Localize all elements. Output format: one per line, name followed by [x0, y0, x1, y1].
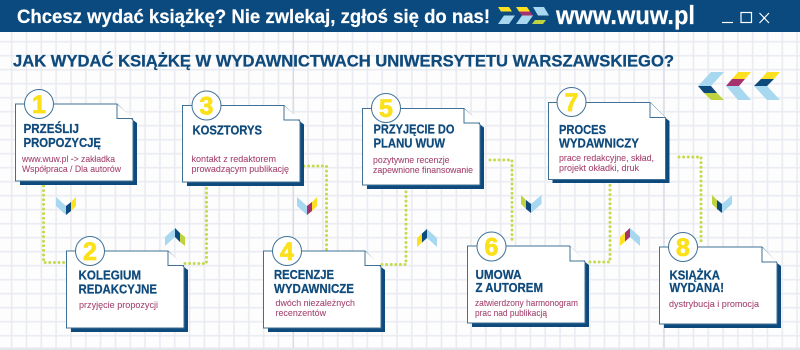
number 4: 4	[280, 238, 294, 266]
panel: step 5	[362, 94, 484, 189]
title: JAK WYDAĆ KSIĄŻKĘ W WYDAWNICTWACH UNIWERSYTETU WARSZAWSKIEGO?	[13, 52, 674, 70]
description: kontakt z redaktorem	[192, 154, 276, 164]
panel: step 7: WYDAWNICZY	[559, 136, 639, 150]
heading: PROCES	[559, 122, 606, 137]
number 7: 7	[565, 89, 578, 117]
panel: step 1	[16, 90, 137, 185]
description: zatwierdzony harmonogram	[475, 298, 578, 308]
panel: step 1: Współpraca / Dla autorów	[22, 164, 121, 174]
panel: step 5: PLANU WUW	[374, 136, 446, 150]
icon: chevron up 6	[620, 228, 640, 246]
number 2: 2	[83, 238, 97, 266]
panel: step 5: zapewnione finansowanie	[373, 165, 473, 175]
panel: step 2: REDAKCYJNE	[78, 282, 157, 296]
description: dwóch niezależnych	[276, 298, 355, 308]
panel: step 6: Z AUTOREM	[476, 280, 543, 295]
connector 5 to 6	[490, 160, 512, 243]
description: pozytywne recenzje	[373, 155, 450, 165]
heading: PRZEŚLIJ	[24, 121, 79, 136]
number 6: 6	[485, 234, 498, 262]
icon: chevron down 1	[56, 197, 76, 215]
description: www.wuw.pl -> zakładka	[21, 154, 116, 164]
number 1: 1	[32, 91, 46, 119]
heading: KSIĄŻKA	[670, 268, 720, 282]
number 8: 8	[676, 234, 690, 262]
panel: step 1: PROPOZYCJĘ	[24, 135, 101, 150]
connector 1 to 2	[44, 186, 66, 262]
heading: PRZYJĘCIE DO	[374, 122, 455, 136]
number 3: 3	[200, 92, 213, 120]
heading: KOLEGIUM	[78, 268, 141, 282]
connector 6 to 7	[590, 184, 610, 262]
panel: step 7	[548, 88, 670, 183]
icon: header chevrons	[498, 7, 549, 24]
icon: chevron down 7	[712, 195, 732, 213]
panel: step 6	[468, 232, 589, 327]
description: prace redakcyjne, skład,	[559, 153, 654, 163]
connector 7 to 8	[679, 157, 701, 241]
panel: step 6: prac nad publikacją	[475, 308, 548, 318]
icon: chevron up 4	[417, 229, 437, 247]
description: dystrybucja i promocja	[669, 299, 760, 309]
panel: step 4: WYDAWNICZE	[274, 281, 354, 296]
heading: RECENZJE	[274, 267, 334, 282]
icon: chevron down 3	[297, 197, 317, 215]
heading: KOSZTORYS	[192, 122, 262, 138]
panel: step 3	[182, 91, 304, 186]
header bar	[0, 0, 800, 32]
panel: step 2	[66, 236, 188, 332]
heading: UMOWA	[476, 267, 522, 282]
header slogan: Chcesz wydać książkę? Nie zwlekaj, zgłoś się do nas!	[17, 7, 490, 28]
icon: chevron down 5	[521, 195, 542, 213]
icon: chevron up 2	[165, 228, 185, 246]
panel: step 8	[660, 232, 781, 328]
panel: step 4	[264, 236, 385, 332]
icon: top right chevrons	[698, 72, 780, 100]
description: przyjęcie propozycji	[79, 300, 158, 310]
panel: step 4: recenzentów	[276, 308, 326, 318]
icon: window controls	[722, 12, 769, 23]
connector 4 to 5	[382, 189, 406, 264]
number 5: 5	[379, 95, 393, 123]
panel: step 7: projekt okładki, druk	[559, 163, 639, 173]
panel: step 3: prowadzącym publikację	[192, 164, 289, 174]
connector 2 to 3	[185, 186, 206, 264]
panel: step 8: WYDANA!	[670, 280, 724, 295]
header url: www.wuw.pl	[555, 0, 695, 30]
connector 3 to 4	[304, 166, 326, 251]
